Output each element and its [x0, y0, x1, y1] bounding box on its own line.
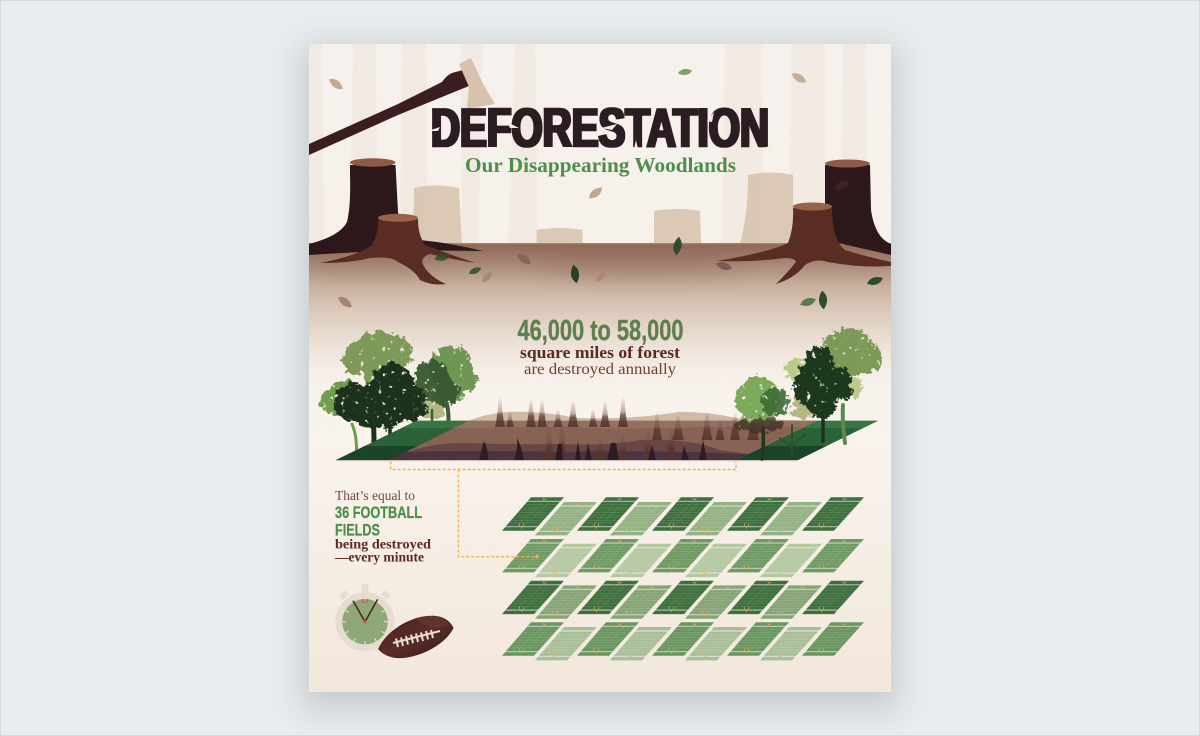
- text: being destroyed every minute: [334, 536, 432, 564]
- icon: football: [378, 616, 454, 658]
- stump: large right: [825, 160, 891, 255]
- deforested brown land: [391, 412, 818, 460]
- icon: stopwatch: [336, 584, 394, 651]
- text: 36 football fields: 36 FOOTBALL: [335, 503, 422, 522]
- football fields grid: row 1: [502, 497, 864, 535]
- falling leaves: [327, 68, 884, 310]
- faded background forest trunks: [309, 44, 868, 243]
- ground wash: [309, 243, 891, 364]
- right tree cluster back: [735, 328, 882, 423]
- subtitle: Our Disappearing Woodlands: [465, 153, 736, 177]
- text: being destroyed every minute: being destroyed: [335, 536, 432, 552]
- football fields grid: row 3: [502, 581, 864, 619]
- left tree cluster front: [334, 361, 459, 428]
- text: 36 football fields: [335, 506, 422, 536]
- football fields grid: row 4: [502, 622, 864, 660]
- statistic: 46,000 to 58,000: 46,000 to 58,000: [518, 315, 684, 347]
- statistic caption bold: square miles of forest: [520, 343, 681, 362]
- icon: stopwatch: 60: [362, 599, 368, 605]
- stump: small left: [320, 214, 476, 284]
- title: [432, 107, 768, 148]
- right tree cluster front: [735, 347, 853, 432]
- poster background card: [309, 44, 891, 692]
- axe: [309, 58, 495, 155]
- text: being destroyed every minute: —every minute: [334, 550, 424, 564]
- left tree trunks: [352, 404, 448, 459]
- text: 36 football fields: FIELDS: [335, 521, 380, 540]
- football fields grid: row 2: [502, 539, 864, 577]
- title: DEFORESTATION: [431, 97, 769, 159]
- dark tree stumps front row: [479, 438, 707, 460]
- statistic caption regular: are destroyed annually: [524, 361, 676, 378]
- stump: large left: [309, 158, 483, 255]
- faded tree stumps: [495, 396, 759, 460]
- stump: small right: [717, 202, 891, 284]
- pale distant stumps: [413, 172, 793, 243]
- text: that's equal to: That’s equal to: [335, 488, 415, 503]
- ground plane green: [330, 420, 890, 461]
- dashed connector bracket and arrow to football field: [391, 462, 736, 558]
- right tree trunks: [762, 405, 845, 459]
- left tree cluster back: [320, 331, 477, 420]
- infographic poster artwork: [309, 44, 891, 692]
